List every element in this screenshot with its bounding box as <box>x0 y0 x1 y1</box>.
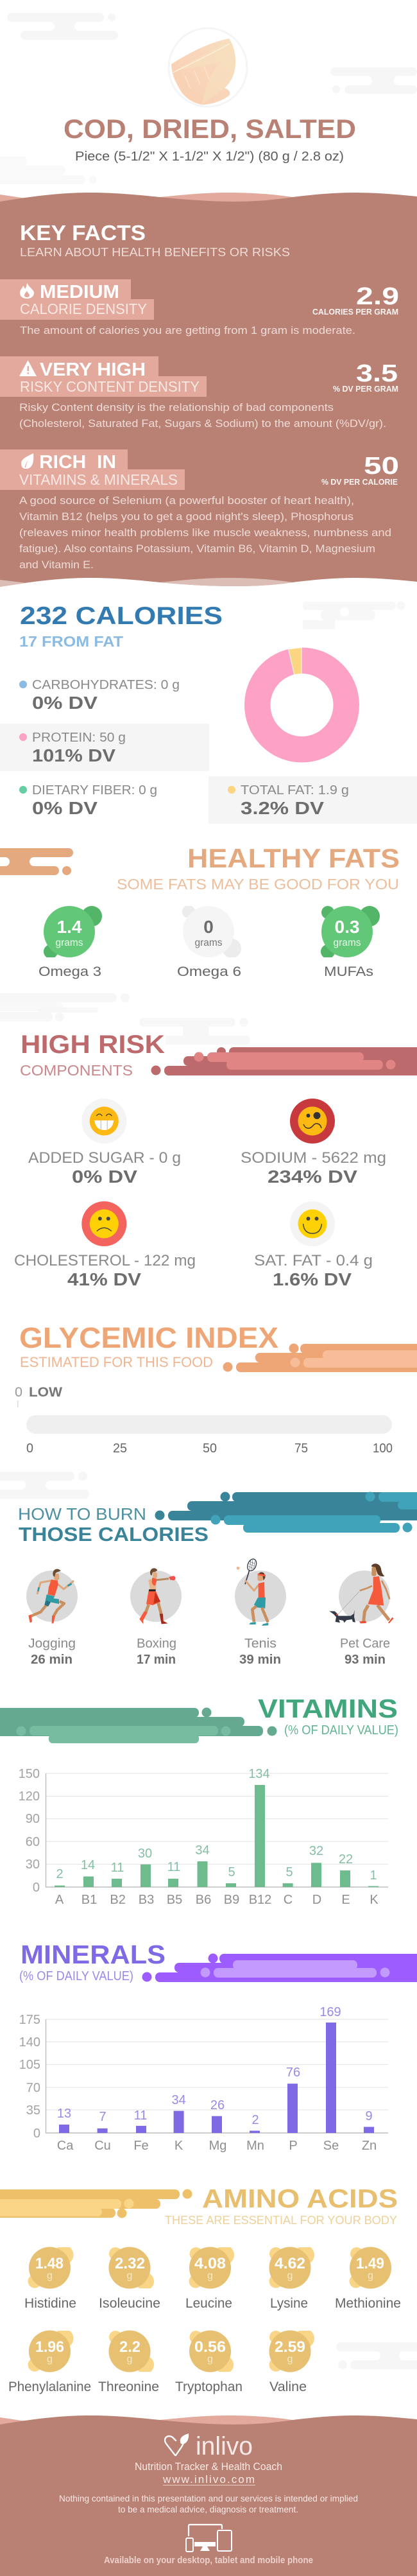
fact: calorie density <box>0 279 399 336</box>
description: (releaves minor health problems like muscle weakness, numbness and <box>19 527 391 539</box>
bar chart: minerals: Cu <box>94 2139 111 2153</box>
subheading: healthy fats: SOME FATS MAY BE GOOD FOR YOU <box>117 876 399 892</box>
fat: mufas: MUFAs <box>324 964 373 979</box>
icon: grinning face <box>81 1099 126 1144</box>
amino acid: phenylalanine: g <box>47 2354 53 2365</box>
legend: protein: 101% DV <box>32 745 115 765</box>
heading: calories: 232 CALORIES <box>20 602 223 630</box>
fact: vitamins and minerals <box>0 449 399 571</box>
bar chart: vitamins: 1 <box>370 1868 377 1883</box>
logo: inlivo: inlivo <box>196 2432 253 2460</box>
label: rich in: RICH IN <box>39 452 116 473</box>
title: COD, DRIED, SALTED <box>64 114 356 144</box>
activity: tennis <box>235 1558 286 1667</box>
gauge track <box>26 1415 392 1434</box>
background clouds: header <box>0 13 417 184</box>
background clouds: high risk <box>0 993 250 1045</box>
bar chart: vitamins: 14 <box>81 1858 95 1872</box>
label: vitamins and minerals: VITAMINS & MINERALS <box>19 471 178 488</box>
website: www.inlivo.com <box>162 2473 255 2485</box>
heading: how to burn: HOW TO BURN <box>18 1504 146 1524</box>
subheading: components: COMPONENTS <box>20 1062 133 1079</box>
label: calorie density: CALORIE DENSITY <box>20 300 147 317</box>
icon: smiling face <box>290 1201 335 1246</box>
label: very high: VERY HIGH <box>40 360 146 380</box>
availability note: Available on your desktop, tablet and mobile phone <box>104 2555 313 2566</box>
amino acid: isoleucine <box>99 2247 160 2311</box>
disclaimer <box>59 2493 358 2514</box>
fact: risky content density <box>0 356 398 430</box>
heading deco: minerals <box>142 1953 417 1982</box>
description: The amount of calories you are getting from 1 gram is moderate. <box>20 325 355 336</box>
bar chart: vitamins: 30 <box>138 1847 152 1861</box>
risk: added sugar: ADDED SUGAR - 0 g <box>28 1149 181 1167</box>
activity: tennis: 39 min <box>239 1653 281 1667</box>
activity: boxing: Boxing <box>137 1637 176 1651</box>
gauge scale: 50 <box>203 1441 217 1456</box>
amino acid: phenylalanine: 1.96 <box>35 2338 64 2356</box>
illustration: tennis player <box>235 1558 286 1626</box>
activity: boxing <box>130 1568 182 1667</box>
fat: mufas: 0.3 <box>335 917 359 937</box>
legend: dietary fiber: 0% DV <box>32 798 98 818</box>
bar chart: vitamins: B12 <box>249 1893 271 1907</box>
donut chart <box>257 647 346 749</box>
bar chart: vitamins: A <box>55 1893 64 1907</box>
bar chart: vitamins: K <box>370 1893 379 1907</box>
bar chart: minerals <box>19 2005 388 2153</box>
illustration: boxer <box>130 1568 182 1624</box>
icon: leaf <box>21 453 33 469</box>
bar chart: minerals: 70 <box>26 2081 40 2095</box>
amino acid: leucine: 4.08 <box>194 2255 226 2272</box>
bar chart: minerals: Ca <box>57 2139 74 2153</box>
activity: jogging: Jogging <box>28 1637 76 1651</box>
gauge scale: 25 <box>113 1441 127 1456</box>
activity: jogging <box>26 1569 78 1667</box>
legend: protein: PROTEIN: 50 g <box>32 731 126 745</box>
bar chart: minerals: 0 <box>33 2127 40 2141</box>
heading deco: burn <box>155 1492 417 1533</box>
heading: amino acids: AMINO ACIDS <box>202 2184 398 2213</box>
amino acid: methionine: g <box>368 2270 373 2281</box>
bar chart: vitamins: 60 <box>26 1835 40 1849</box>
bar chart: vitamins: 90 <box>26 1812 40 1826</box>
bar chart: vitamins: 22 <box>339 1852 353 1867</box>
bar chart: minerals: Zn <box>362 2139 377 2153</box>
fat: omega 3: 1.4 <box>57 917 82 937</box>
amino acid: lysine: 4.62 <box>275 2255 305 2272</box>
icon: flame <box>20 283 34 299</box>
bar chart: vitamins <box>19 1767 388 1907</box>
amino acid: methionine: Methionine <box>335 2296 401 2311</box>
bar chart: vitamins: 34 <box>195 1843 210 1858</box>
subheading: key facts: LEARN ABOUT HEALTH BENEFITS OR RISKS <box>20 245 290 259</box>
bar chart: minerals: 9 <box>365 2109 373 2123</box>
heading deco: amino acids <box>0 2189 192 2218</box>
glycemic index gauge <box>15 1385 393 1456</box>
bar chart: vitamins: B5 <box>167 1893 182 1907</box>
amino acid: phenylalanine <box>8 2329 91 2394</box>
amino acid: methionine: 1.49 <box>356 2255 384 2272</box>
risk: sodium: 234% DV <box>268 1167 357 1187</box>
risk: added sugar <box>28 1099 181 1187</box>
amino acid: threonine: 2.2 <box>119 2338 140 2356</box>
bar chart: vitamins: 5 <box>285 1865 293 1879</box>
value: 3.5: 3.5 <box>356 360 398 387</box>
description: Risky Content density is the relationship of bad components <box>19 402 334 413</box>
description: fatigue). Also contains Potassium, Vitamin B6, Vitamin D, Magnesium <box>19 543 375 555</box>
heading deco: healthy fats <box>0 848 73 875</box>
description <box>19 495 391 571</box>
amino acid: histidine: 1.48 <box>35 2255 64 2272</box>
illustration: dog walker <box>329 1563 393 1623</box>
heading: glycemic index: GLYCEMIC INDEX <box>19 1321 278 1354</box>
description: A good source of Selenium (a powerful booster of heart health), <box>19 495 354 507</box>
amino acid: histidine: g <box>47 2270 53 2281</box>
bar chart: vitamins: 32 <box>309 1844 323 1858</box>
legend: protein <box>19 731 126 765</box>
disclaimer: Nothing contained in this presentation and our services is intended or implied <box>59 2493 358 2503</box>
panel: key facts <box>0 193 417 587</box>
legend: total fat: 3.2% DV <box>241 798 324 818</box>
bar chart: minerals: 13 <box>57 2107 71 2121</box>
bar chart: vitamins: 2 <box>56 1867 64 1881</box>
risk: added sugar: 0% DV <box>72 1167 137 1187</box>
value: 2.9: 2.9 <box>356 283 399 310</box>
heading: healthy fats: HEALTHY FATS <box>187 843 400 873</box>
amino acid: valine: 2.59 <box>275 2338 305 2356</box>
fat: omega 6 <box>177 905 241 979</box>
marker: low label: LOW <box>29 1385 62 1400</box>
risk: saturated fat <box>254 1201 373 1289</box>
value: 50: 50 <box>364 453 399 480</box>
bar chart: minerals: 105 <box>19 2058 40 2072</box>
amino acid: leucine: g <box>207 2270 213 2281</box>
marker: value: 0 <box>15 1385 22 1400</box>
icon: distressed face <box>290 1099 335 1144</box>
activity: pet care: Pet Care <box>340 1637 390 1651</box>
bar chart: vitamins: 134 <box>248 1767 270 1781</box>
bar chart: vitamins: C <box>284 1893 293 1907</box>
disclaimer: to be a medical advice, diagnosis or treatment. <box>118 2504 298 2514</box>
legend: total fat: TOTAL FAT: 1.9 g <box>241 783 349 797</box>
amino acid: threonine <box>98 2331 159 2394</box>
amino acid: valine: g <box>287 2354 293 2365</box>
heading: minerals: MINERALS <box>21 1940 166 1969</box>
bar chart: minerals: Mg <box>209 2139 226 2153</box>
amino acid: tryptophan: Tryptophan <box>175 2380 243 2394</box>
gauge scale: 75 <box>294 1441 308 1456</box>
bar chart: minerals: Fe <box>133 2139 149 2153</box>
unit: dv per calorie: % DV PER CALORIE <box>321 477 398 487</box>
heading: how to burn: THOSE CALORIES <box>19 1524 208 1545</box>
bar chart: vitamins: D <box>312 1893 321 1907</box>
subheading: from fat: 17 FROM FAT <box>19 633 124 650</box>
bar chart: vitamins: B9 <box>224 1893 239 1907</box>
legend: carbohydrates: CARBOHYDRATES: 0 g <box>32 678 180 692</box>
legend: dietary fiber: DIETARY FIBER: 0 g <box>32 783 157 797</box>
fat: omega 3: Omega 3 <box>38 964 101 979</box>
activity: pet care <box>329 1563 393 1667</box>
bar chart: vitamins: 5 <box>228 1865 235 1879</box>
bar chart: minerals: 175 <box>19 2013 40 2027</box>
bar chart: minerals: 140 <box>19 2035 40 2049</box>
amino acid: valine: Valine <box>269 2380 307 2394</box>
heading deco: vitamins <box>0 1708 277 1743</box>
logo: inlivo <box>165 2432 253 2460</box>
bar chart: minerals: Se <box>323 2139 339 2153</box>
amino acid: phenylalanine: Phenylalanine <box>8 2380 91 2394</box>
activity: pet care: 93 min <box>345 1653 386 1667</box>
food photo: cod fillet <box>169 28 247 107</box>
heading: how to burn <box>18 1504 208 1545</box>
bar chart: vitamins: 11 <box>111 1861 124 1875</box>
illustration: jogger <box>26 1569 78 1623</box>
fat: omega 3 <box>38 906 102 979</box>
bar chart: vitamins: B6 <box>196 1893 211 1907</box>
heading: high risk: HIGH RISK <box>21 1031 165 1059</box>
bar chart: vitamins: B2 <box>110 1893 126 1907</box>
description: and Vitamin E. <box>19 559 94 571</box>
heading: vitamins: VITAMINS <box>258 1694 398 1723</box>
bar chart: vitamins: 150 <box>19 1767 40 1781</box>
bar chart: minerals: 7 <box>99 2110 106 2124</box>
fat: mufas: grams <box>333 937 361 948</box>
risk: sodium <box>241 1099 386 1187</box>
amino acid: lysine: g <box>287 2270 293 2281</box>
risk: cholesterol <box>14 1201 196 1289</box>
bar chart: minerals: Mn <box>246 2139 264 2153</box>
amino acid: lysine <box>269 2245 314 2311</box>
heading: key facts: KEY FACTS <box>20 221 146 245</box>
bar chart: vitamins: E <box>341 1893 350 1907</box>
bar chart: minerals: K <box>174 2139 183 2153</box>
icon: devices <box>186 2525 232 2552</box>
macronutrient legend <box>0 678 417 824</box>
amino acid: methionine <box>335 2247 401 2311</box>
icon: warning <box>19 360 37 376</box>
bar chart: vitamins: 120 <box>19 1789 40 1804</box>
tagline: Nutrition Tracker & Health Coach <box>135 2460 282 2473</box>
risk: cholesterol: CHOLESTEROL - 122 mg <box>14 1252 196 1269</box>
unit: calories per gram: CALORIES PER GRAM <box>312 307 398 317</box>
heading deco: high risk <box>151 1047 417 1075</box>
fat: omega 6: grams <box>194 937 223 948</box>
description <box>19 402 386 430</box>
icon: sad face <box>81 1201 126 1246</box>
bar chart: minerals: 26 <box>210 2098 225 2112</box>
bar chart: minerals: 2 <box>251 2113 259 2127</box>
bar chart: minerals: P <box>289 2139 298 2153</box>
amino acid: isoleucine: Isoleucine <box>99 2296 160 2311</box>
background cloud: calories <box>303 601 405 629</box>
gauge scale: 0 <box>26 1441 33 1456</box>
legend: dietary fiber <box>19 783 157 818</box>
legend: carbohydrates <box>19 678 180 713</box>
subheading: vitamins: (% OF DAILY VALUE) <box>284 1723 398 1737</box>
bar chart: vitamins: B3 <box>139 1893 154 1907</box>
heading deco: glycemic index <box>223 1343 417 1372</box>
amino acid: lysine: Lysine <box>270 2296 308 2311</box>
amino acid: tryptophan <box>175 2331 243 2394</box>
bar chart: minerals: 76 <box>286 2066 300 2080</box>
legend: carbohydrates: 0% DV <box>32 693 98 713</box>
label: risky content density: RISKY CONTENT DENSITY <box>20 378 200 395</box>
amino acid: tryptophan: 0.56 <box>194 2338 226 2356</box>
background cloud: burn <box>0 1472 89 1499</box>
bar chart: minerals: 169 <box>319 2005 341 2019</box>
amino acid: valine <box>269 2329 314 2394</box>
subheading: minerals: (% OF DAILY VALUE) <box>19 1969 133 1983</box>
description: Vitamin B12 (helps you to get a good night's sleep), Phosphorus <box>19 511 353 523</box>
amino acid: leucine: Leucine <box>185 2296 232 2311</box>
subheading: amino acids: THESE ARE ESSENTIAL FOR YOUR BODY <box>165 2213 397 2227</box>
gauge scale <box>26 1441 393 1456</box>
amino acid: threonine: g <box>127 2354 132 2365</box>
bar chart: vitamins: 30 <box>26 1858 40 1872</box>
bar chart: vitamins: 0 <box>33 1881 40 1895</box>
subheading: glycemic index: ESTIMATED FOR THIS FOOD <box>20 1354 213 1370</box>
fat: omega 6: 0 <box>203 917 214 937</box>
background cloud: amino acids <box>336 2342 417 2369</box>
activity: boxing: 17 min <box>137 1653 176 1667</box>
risk: sodium: SODIUM - 5622 mg <box>241 1149 386 1167</box>
amino acid: isoleucine: g <box>127 2270 132 2281</box>
amino acid: leucine <box>185 2245 234 2311</box>
activity: jogging: 26 min <box>31 1653 72 1667</box>
legend: total fat <box>228 783 349 818</box>
amino acid: tryptophan: g <box>207 2354 213 2365</box>
amino acid: isoleucine: 2.32 <box>115 2255 145 2272</box>
activity: tennis: Tenis <box>244 1637 277 1651</box>
label: medium: MEDIUM <box>40 282 119 302</box>
description: (Cholesterol, Saturated Fat, Sugars & Sodium) to the amount (%DV/gr). <box>19 418 386 430</box>
panel: footer <box>0 2415 417 2576</box>
risk: cholesterol: 41% DV <box>67 1269 141 1289</box>
bar chart: minerals: 11 <box>134 2109 147 2123</box>
serving size: Piece (5-1/2" X 1-1/2" X 1/2") (80 g / 2.8 oz) <box>75 150 344 164</box>
amino acid: threonine: Threonine <box>98 2380 159 2394</box>
fat: omega 6: Omega 6 <box>177 964 241 979</box>
bar chart: vitamins: 11 <box>167 1860 180 1874</box>
bar chart: minerals: 34 <box>171 2093 186 2107</box>
risk: saturated fat: SAT. FAT - 0.4 g <box>254 1252 373 1269</box>
risk: saturated fat: 1.6% DV <box>273 1269 352 1289</box>
amino acid: histidine: Histidine <box>24 2296 76 2311</box>
bar chart: vitamins: B1 <box>81 1893 97 1907</box>
fat: omega 3: grams <box>55 937 83 948</box>
gauge scale: 100 <box>373 1441 393 1456</box>
amino acid: histidine <box>24 2245 76 2311</box>
fat: mufas <box>321 906 380 979</box>
bar chart: minerals: 35 <box>26 2103 40 2118</box>
unit: dv per gram: % DV PER GRAM <box>333 384 398 394</box>
